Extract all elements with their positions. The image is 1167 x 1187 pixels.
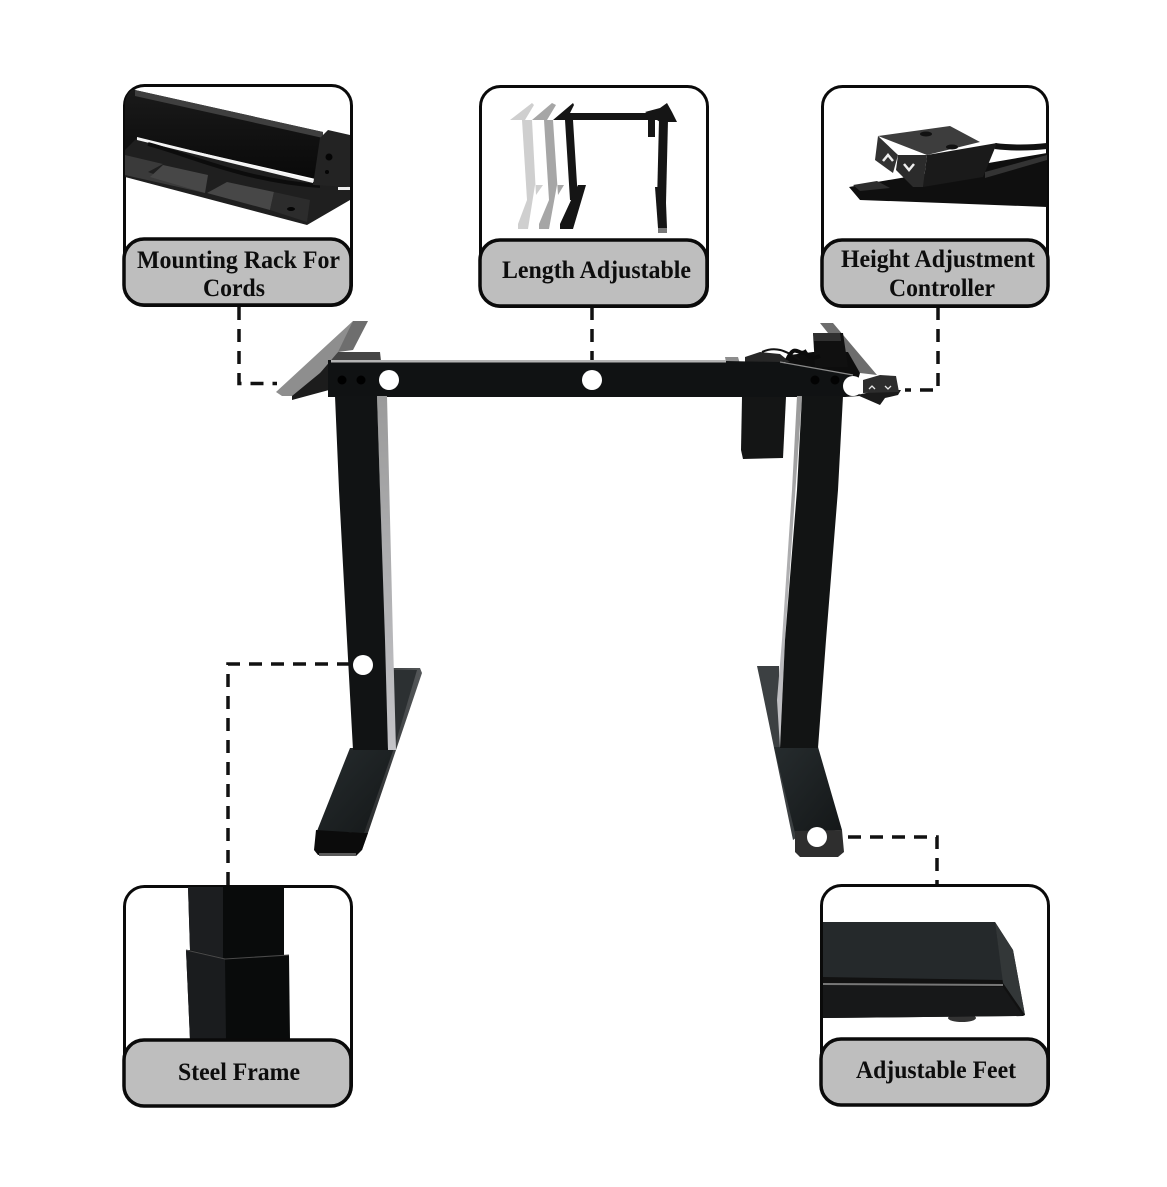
right leg xyxy=(777,396,843,748)
label: height adjustment controller: Controller xyxy=(889,275,995,302)
panel: length adjustable xyxy=(480,86,708,306)
left mounting plate xyxy=(276,321,381,400)
connector: adjustable feet xyxy=(848,837,937,884)
crossbeam xyxy=(328,360,860,397)
right foot xyxy=(757,666,844,857)
photo: sliding frame xyxy=(510,103,677,233)
infographic canvas xyxy=(122,84,1050,1108)
label: mounting rack: Mounting Rack For xyxy=(137,247,340,274)
photo: mounting rack xyxy=(125,90,350,225)
label: mounting rack: Cords xyxy=(203,275,265,302)
label: adjustable feet: Adjustable Feet xyxy=(856,1057,1017,1084)
panel: adjustable feet xyxy=(821,886,1048,1105)
label: height adjustment controller: Height Adjustment xyxy=(841,246,1036,273)
mini controller xyxy=(857,375,901,405)
desk frame illustration xyxy=(276,321,901,857)
photo: steel column xyxy=(186,887,290,1040)
label: steel frame xyxy=(124,1040,351,1106)
photo: foot end xyxy=(823,922,1025,1022)
connector: length adjustable xyxy=(590,307,594,360)
panel: mounting rack for cords xyxy=(124,86,352,306)
label: height adjustment controller xyxy=(822,240,1048,306)
photo: controller xyxy=(849,126,1047,207)
label: length adjustable xyxy=(480,240,707,306)
label: steel frame: Steel Frame xyxy=(178,1059,300,1086)
right mounting plate and control box xyxy=(725,323,877,380)
callout dots xyxy=(353,370,863,847)
motor xyxy=(741,397,786,459)
panel: height adjustment controller xyxy=(822,86,1048,306)
panel: steel frame xyxy=(124,886,352,1106)
label: mounting rack xyxy=(124,239,351,305)
left foot xyxy=(314,668,422,856)
connector: steel frame xyxy=(228,664,350,885)
left leg xyxy=(335,396,396,750)
label: adjustable feet xyxy=(821,1039,1048,1105)
connector: height controller xyxy=(905,307,938,390)
label: length adjustable: Length Adjustable xyxy=(502,257,691,284)
connector: mounting rack xyxy=(239,307,277,384)
